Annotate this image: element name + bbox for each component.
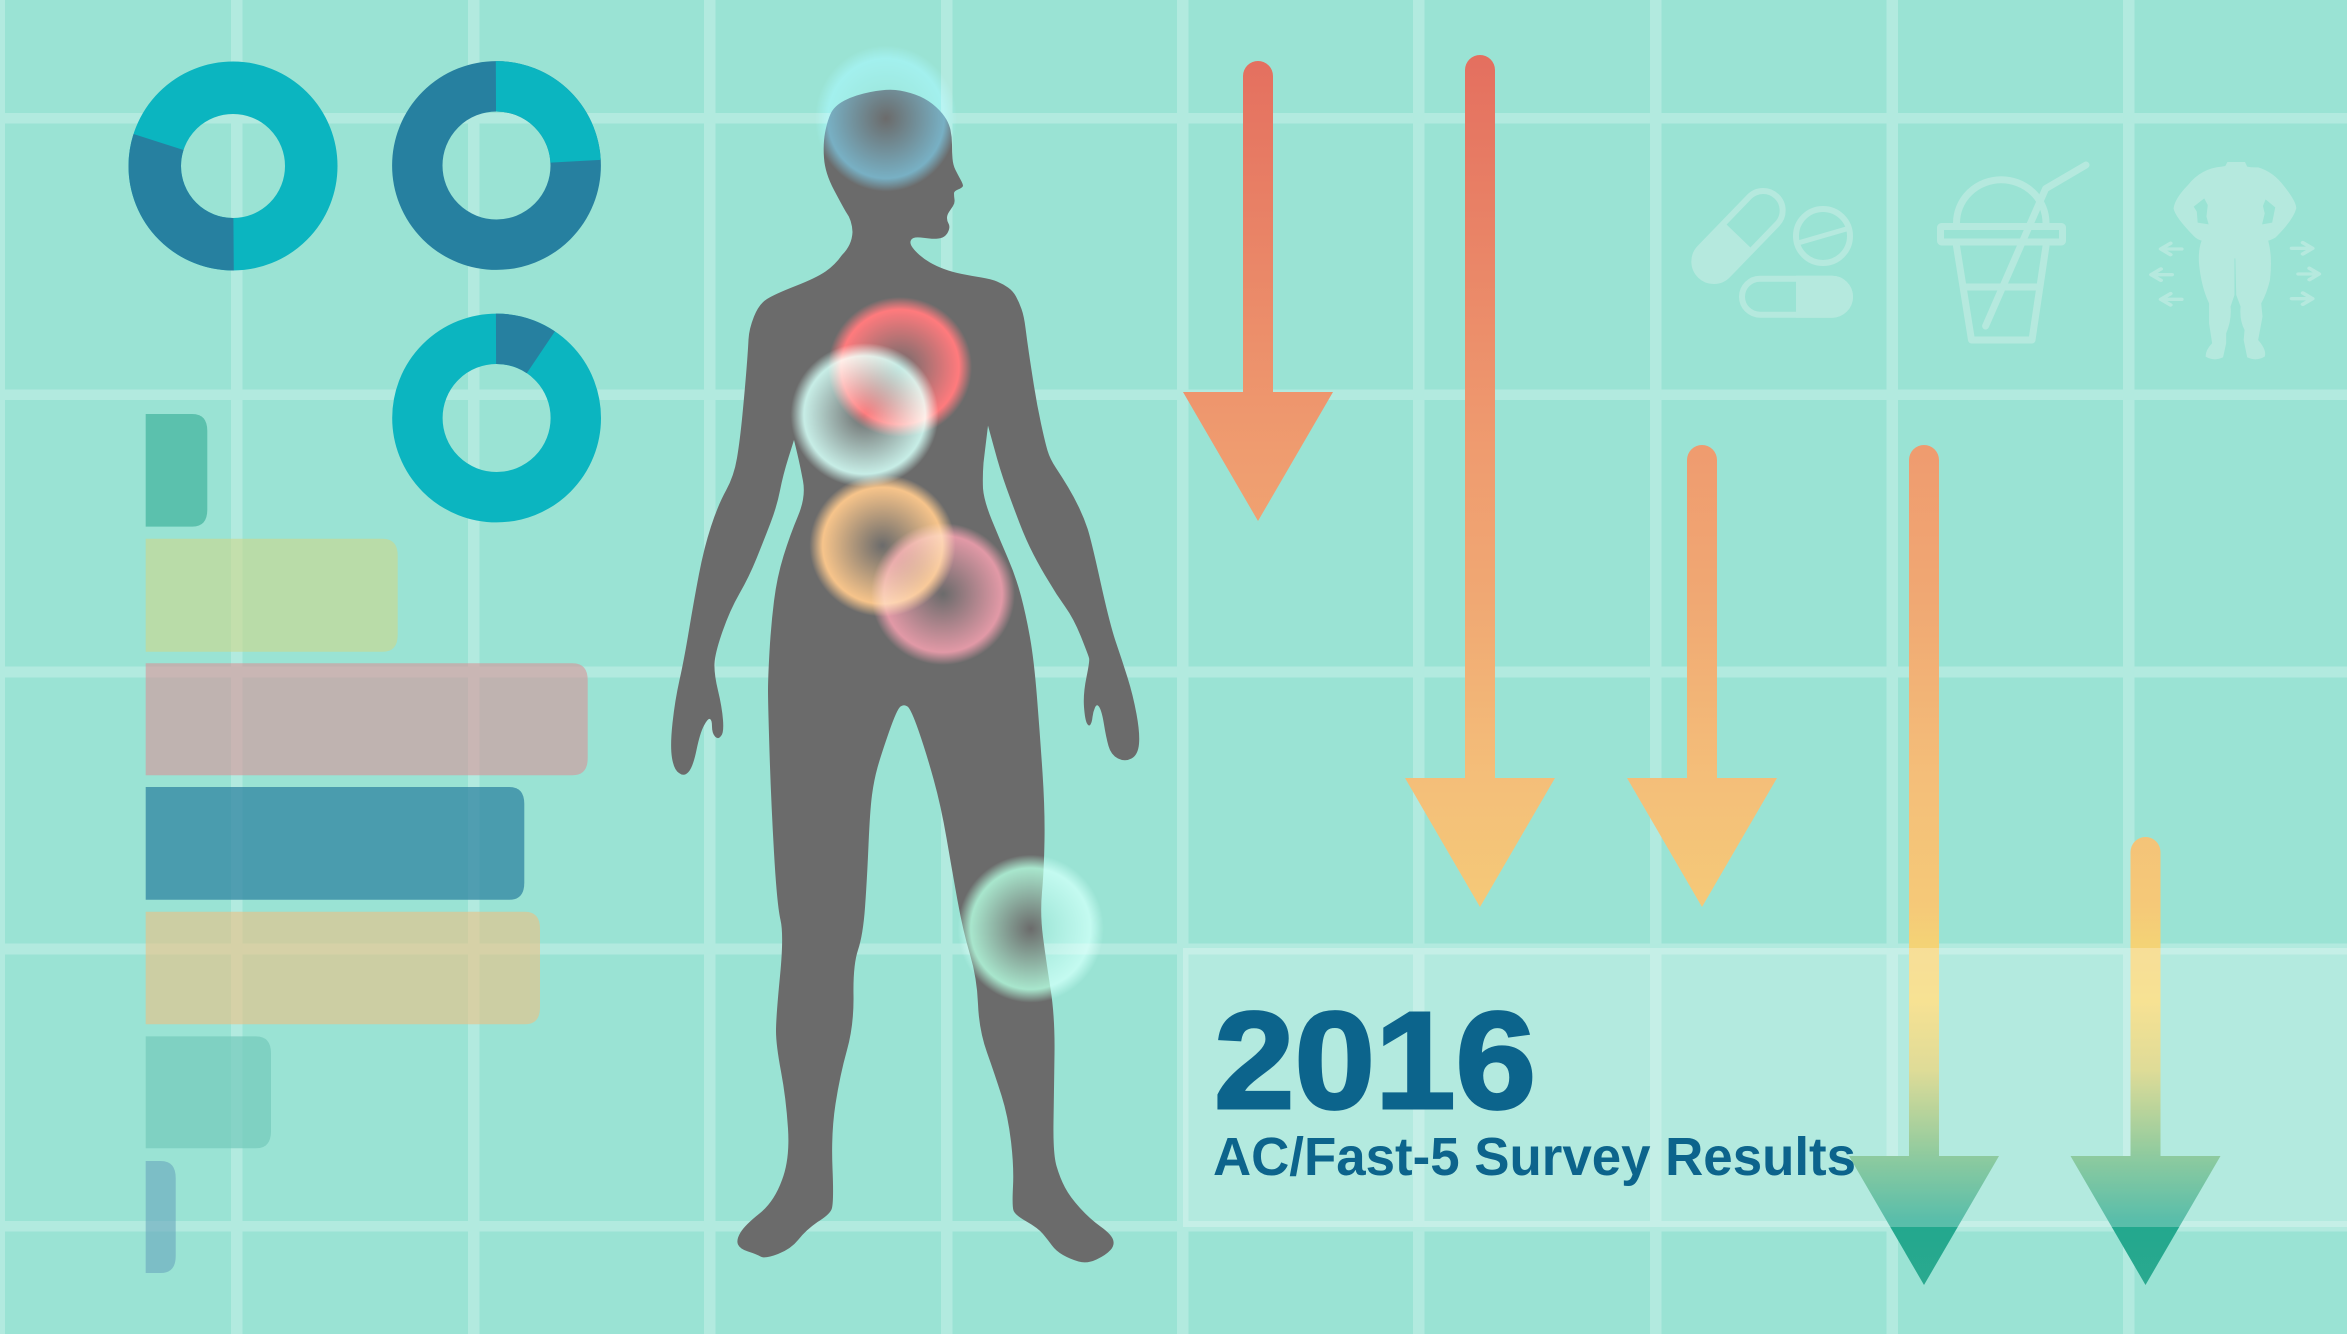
human body silhouette [671, 90, 1139, 1262]
glow: head [815, 46, 957, 192]
donut chart: top left [155, 88, 311, 244]
donut chart: top right [417, 86, 576, 245]
title panel [1183, 948, 2347, 1227]
arrow 2 [1405, 55, 1555, 907]
subtitle: AC/Fast-5 Survey Results [1213, 1127, 1856, 1187]
bar 3 [146, 663, 588, 775]
arrow 4 [1849, 445, 1999, 1285]
glow: knee [958, 855, 1104, 1003]
diagonal capsule [1684, 181, 1793, 292]
glow: abdomen [871, 523, 1015, 665]
bar 1 [146, 414, 207, 527]
icon: body with expanding arrows [2151, 162, 2319, 359]
arrows [1183, 55, 2220, 1285]
arrow 3 [1627, 445, 1777, 907]
icon: drink cup [1940, 165, 2086, 340]
arrow 5 [2070, 837, 2220, 1285]
round tablet [1796, 209, 1850, 263]
bar 2 [146, 539, 398, 652]
bar 4 [146, 787, 524, 900]
bar 7 [146, 1161, 176, 1273]
bar 5 [146, 912, 540, 1024]
donut chart: lower [417, 339, 576, 497]
glow: stomach [810, 475, 956, 617]
bar 6 [146, 1036, 271, 1148]
horizontal capsule [1742, 276, 1853, 318]
arrow 1 [1183, 61, 1333, 521]
title: year: 2016 [1214, 984, 1536, 1138]
bar chart [146, 414, 588, 1273]
glow: heart [828, 297, 972, 437]
icon: pills [1684, 181, 1853, 318]
glow: lungs [791, 343, 939, 487]
